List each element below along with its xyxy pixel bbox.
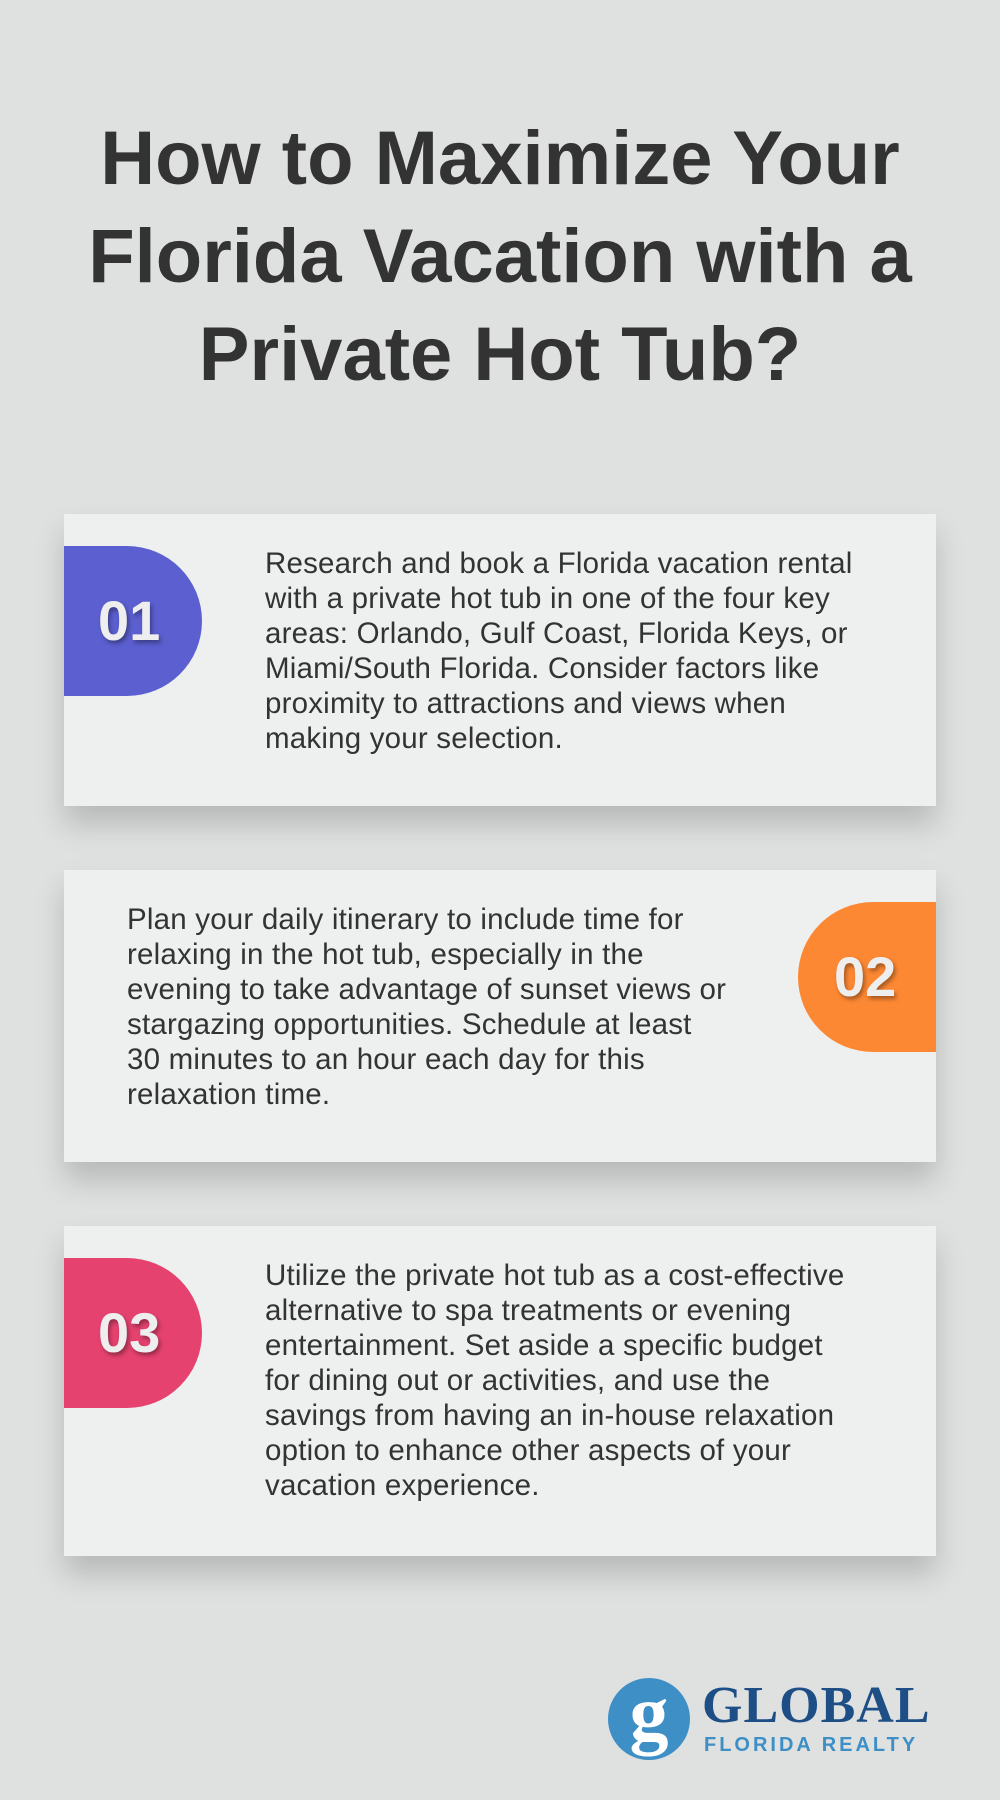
text step 01: proximity to attractions and views when bbox=[265, 687, 786, 720]
text step 03: entertainment. Set aside a specific budget bbox=[265, 1329, 823, 1362]
title: Private Hot Tub? bbox=[199, 312, 801, 397]
panel: step 03 bbox=[64, 1226, 936, 1556]
text step 02: relaxation time. bbox=[127, 1078, 330, 1111]
badge 01 bbox=[64, 546, 202, 696]
text step 01: Research and book a Florida vacation rental bbox=[265, 547, 852, 580]
logo text: GLOBAL bbox=[702, 1677, 930, 1734]
text step 03: alternative to spa treatments or evening bbox=[265, 1294, 791, 1327]
text step 02: evening to take advantage of sunset views or bbox=[127, 973, 726, 1006]
text step 02: Plan your daily itinerary to include time for bbox=[127, 903, 684, 936]
title bbox=[88, 116, 912, 397]
icon: logo g bbox=[608, 1678, 690, 1760]
text step 01: areas: Orlando, Gulf Coast, Florida Keys, or bbox=[265, 617, 848, 650]
panel: step 02 bbox=[64, 870, 936, 1162]
badge 03: 03 bbox=[98, 1301, 160, 1364]
text step 03: savings from having an in-house relaxation bbox=[265, 1399, 834, 1432]
panel: step 01 bbox=[64, 514, 936, 806]
badge 03 bbox=[64, 1258, 202, 1408]
text step 03: option to enhance other aspects of your bbox=[265, 1434, 791, 1467]
text step 01: with a private hot tub in one of the four key bbox=[265, 582, 830, 615]
text step 03 bbox=[265, 1259, 844, 1502]
logo: FLORIDA REALTY bbox=[704, 1734, 918, 1756]
badge 02 bbox=[798, 902, 936, 1052]
text step 02: relaxing in the hot tub, especially in the bbox=[127, 938, 644, 971]
title: How to Maximize Your bbox=[100, 116, 900, 201]
text step 01: making your selection. bbox=[265, 722, 563, 755]
text step 02: 30 minutes to an hour each day for this bbox=[127, 1043, 645, 1076]
text step 01 bbox=[265, 547, 852, 755]
title: Florida Vacation with a bbox=[88, 214, 912, 299]
badge 01: 01 bbox=[98, 589, 160, 652]
text step 01: Miami/South Florida. Consider factors like bbox=[265, 652, 819, 685]
text step 02 bbox=[127, 903, 726, 1111]
text step 02: stargazing opportunities. Schedule at least bbox=[127, 1008, 692, 1041]
badge 02: 02 bbox=[834, 945, 896, 1008]
text step 03: vacation experience. bbox=[265, 1469, 540, 1502]
icon: logo g: g bbox=[630, 1669, 668, 1756]
logo bbox=[608, 1669, 930, 1760]
text step 03: Utilize the private hot tub as a cost-effective bbox=[265, 1259, 844, 1292]
text step 03: for dining out or activities, and use the bbox=[265, 1364, 770, 1397]
